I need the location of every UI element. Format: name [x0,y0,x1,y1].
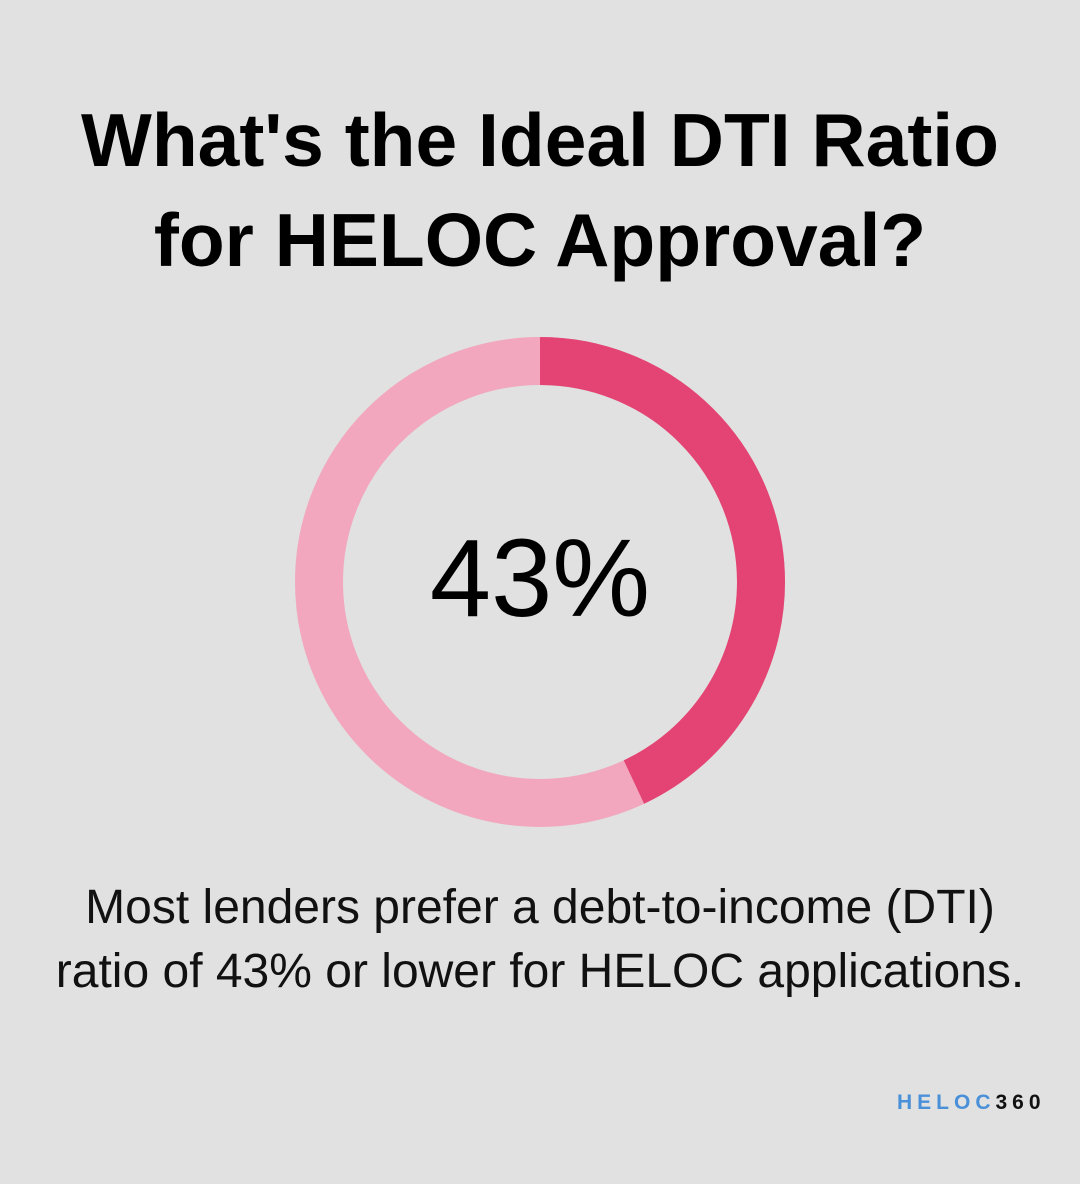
logo: HELOC360 [897,1091,1046,1114]
title: What's the Ideal DTI Ratio [81,98,999,182]
description: Most lenders prefer a debt-to-income (DTI) [85,881,995,934]
title [81,98,999,282]
description: ratio of 43% or lower for HELOC applications. [56,945,1024,998]
title: for HELOC Approval? [154,198,926,282]
description [56,881,1024,998]
donut chart: 43% [430,517,650,640]
